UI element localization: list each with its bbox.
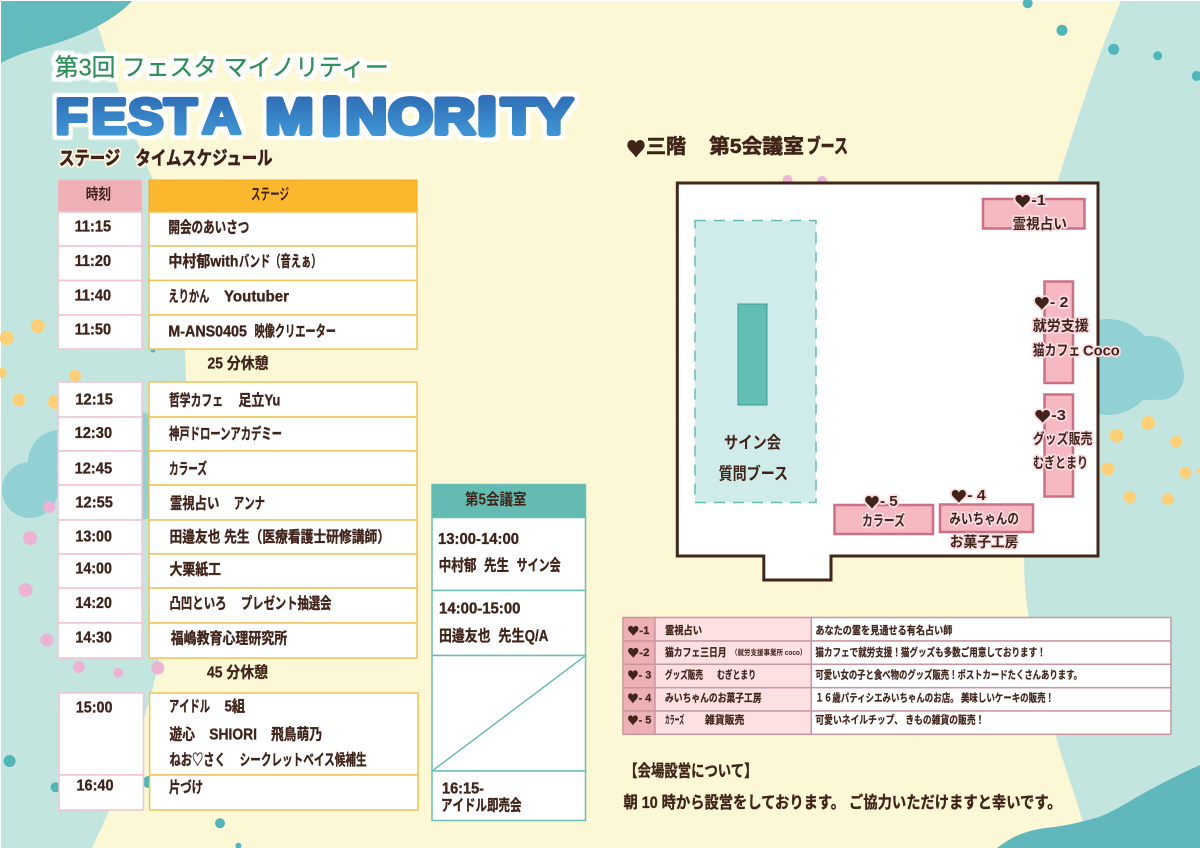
booth legend table: カラーズ (665, 712, 684, 726)
setup notice: 【会場設営について】 (624, 761, 758, 780)
title: Japanese: 第3回 フェスタ マイノリティー (55, 54, 389, 82)
schedule: stage column block 3: 飛鳥萌乃 (271, 724, 322, 743)
schedule: time column block 2: 14:30 (75, 630, 112, 646)
title: FESTA MINORITY: MINORITY (266, 89, 573, 145)
booth legend table: 霊視占い (665, 623, 702, 637)
schedule: stage column block 2: プレゼント抽選会 (241, 593, 332, 612)
room outline (677, 183, 1098, 580)
booth legend table: 可愛いネイルチップ、 きもの雑貨の販売！ (815, 712, 984, 726)
booth 1 (983, 190, 1084, 233)
setup notice (624, 761, 1062, 812)
booth 3: ♥-3 (1034, 405, 1066, 427)
schedule: stage column block 1: M-ANS0405 (168, 323, 247, 340)
schedule: stage column block 2: 大栗紙工 (170, 560, 221, 578)
schedule: stage column block 2: アンナ (234, 495, 265, 512)
sign booth area: サイン会 (724, 434, 781, 452)
panel: room 5 schedule (432, 484, 586, 820)
booth 3 (1033, 394, 1093, 496)
heading: third floor booths: ♥三階 (626, 132, 686, 162)
schedule: time column block 2: 12:55 (75, 494, 113, 512)
panel: room 5 schedule: 中村郁 (439, 555, 477, 574)
schedule: time column block 3: 15:00 (76, 700, 113, 716)
booth legend table (623, 618, 1171, 734)
booth legend table: むぎとまり (717, 667, 756, 681)
schedule: time column block 1: 時刻 (86, 186, 111, 203)
schedule: stage column block 3: 片づけ (169, 778, 203, 796)
schedule: time column block 1: 11:40 (75, 288, 111, 304)
booth legend table: 可愛い女の子と食べ物のグッズ販売！ポストカードたくさんあります。 (815, 667, 1082, 681)
booth 4: みいちゃんの (949, 511, 1019, 528)
schedule: stage column block 2: 福嶋教育心理研究所 (171, 628, 288, 647)
schedule: stage column block 2: 田邉友也 先生（医療看護士研修講師） (170, 527, 390, 546)
booth 2: 猫カフェ (1033, 342, 1080, 360)
schedule: time column block 1: 11:15 (75, 218, 111, 236)
panel: room 5 schedule: 第5会議室 (465, 490, 526, 508)
schedule: stage column block 2: 霊視占い (170, 494, 219, 512)
booth legend table: ♥-1 (627, 623, 650, 639)
booth 2: Coco (1083, 344, 1120, 360)
schedule: stage column block 1: Youtuber (224, 288, 289, 305)
schedule: stage column block 2: 哲学カフェ (169, 390, 223, 409)
title: FESTA MINORITY (55, 89, 573, 145)
title: FESTA MINORITY: FESTA (55, 89, 241, 145)
booth 5: カラーズ (862, 512, 905, 530)
schedule: time column block 2: 12:45 (75, 460, 112, 478)
schedule: time column block 2 (58, 382, 142, 658)
panel: room 5 schedule: 13:00-14:00 (438, 531, 519, 548)
booth legend table: あなたの霊を見通せる有名占い師 (815, 623, 952, 637)
schedule: time column block 1: 11:50 (75, 322, 111, 338)
panel: room 5 schedule: 先生 (484, 556, 509, 574)
booth legend table: （就労支援事業所 coco） (731, 647, 806, 657)
sign booth area: 質問ブース (719, 464, 788, 484)
booth legend table: ♥- 4 (627, 691, 652, 707)
heading: stage time schedule: ステージ タイムスケジュール (59, 148, 272, 170)
schedule: time column block 2: 12:30 (75, 425, 112, 442)
schedule: time column block 1 (58, 180, 142, 349)
booth legend table: みいちゃんのお菓子工房 (665, 691, 762, 705)
panel: room 5 schedule: 14:00-15:00 (439, 600, 520, 617)
booth 5: ♥- 5 (864, 491, 898, 513)
panel: room 5 schedule: 田邉友也 (439, 627, 491, 645)
booth 4: お菓子工房 (950, 534, 1018, 551)
schedule: time column block 2: 13:00 (75, 528, 112, 546)
booth 1: 霊視占い (1012, 216, 1067, 233)
booth 3: むぎとまり (1033, 454, 1088, 472)
schedule: stage column block 1: 開会のあいさつ (168, 218, 249, 236)
break: 25 minutes: 25 分休憩 (208, 354, 269, 372)
heading: third floor booths (626, 132, 848, 162)
panel: room 5 schedule: 先生Q/A (498, 627, 548, 645)
booth legend table: ♥- 3 (627, 667, 651, 683)
schedule: stage column block 1: バンド（音えぁ） (239, 252, 322, 270)
right cloud (1060, 319, 1184, 415)
schedule: time column block 3: 16:40 (76, 778, 114, 794)
booth 4: ♥- 4 (950, 485, 986, 507)
schedule: stage column block 1: 中村郁with (168, 251, 238, 270)
booth 3: グッズ販売 (1033, 430, 1093, 448)
panel: room 5 schedule: サイン会 (517, 556, 561, 574)
schedule: stage column block 3: SHIORI (209, 726, 257, 743)
schedule: stage column block 2: 足立Yu (238, 391, 280, 409)
booth legend table: 雑貨販売 (705, 712, 744, 726)
booth 1: ♥-1 (1014, 190, 1046, 212)
setup notice: 朝 10 時から設営をしております。 ご協力いただけますと幸いです。 (624, 792, 1062, 812)
booth legend table: 猫カフェ三日月 (665, 645, 727, 659)
booth legend table: １６歳パティシエみいちゃんのお店。 美味しいケーキの販売！ (815, 691, 1054, 705)
booth 4 (940, 485, 1033, 551)
booth 2 (1033, 282, 1120, 383)
booth legend table: ♥- 5 (627, 712, 651, 728)
schedule: stage column block 1: ステージ (251, 186, 289, 204)
schedule: time column block 2: 14:20 (75, 595, 112, 612)
decorative dots: yellow (0, 319, 1200, 505)
schedule: stage column block 1: えりかん (168, 287, 209, 305)
schedule: stage column block 3: 5組 (225, 697, 246, 715)
booth 5 (834, 491, 933, 534)
schedule: time column block 2: 12:15 (75, 392, 113, 408)
floor plan (677, 183, 1120, 580)
left cloud (2, 410, 184, 522)
booth 2: 就労支援 (1033, 318, 1089, 335)
booth legend table: ♥-2 (627, 645, 650, 661)
booth legend table: グッズ販売 (665, 667, 703, 681)
schedule: stage column block 1 (149, 180, 417, 349)
schedule: stage column block 2: 凸凹といろ (170, 594, 226, 612)
schedule: stage column block 2: 神戸ドローンアカデミー (169, 424, 282, 443)
break: 45 minutes: 45 分休憩 (207, 662, 268, 682)
schedule: stage column block 3 (150, 693, 418, 810)
schedule: stage column block 2: カラーズ (169, 459, 207, 478)
schedule: time column block 1: 11:20 (75, 253, 111, 270)
panel: room 5 schedule: アイドル即売会 (441, 796, 522, 814)
panel: room 5 schedule: 16:15- (442, 780, 484, 797)
schedule: stage column block 3: 遊心 (170, 724, 195, 743)
schedule: stage column block 1: 映像クリエーター (254, 322, 336, 340)
decorative dots: pink (19, 175, 827, 678)
schedule: stage column block 3: アイドル (169, 698, 210, 715)
heading: third floor booths: ブース (807, 134, 848, 158)
booth 2: ♥- 2 (1034, 292, 1068, 314)
sign booth area (695, 220, 816, 502)
schedule: stage column block 2 (149, 382, 417, 658)
schedule: time column block 3 (59, 693, 144, 810)
booth legend table: 猫カフェで就労支援！猫グッズも多数ご用意しております！ (815, 645, 1046, 659)
schedule: stage column block 3: ねお♡さく (170, 751, 226, 769)
schedule: stage column block 3: シークレットベイス候補生 (240, 751, 367, 769)
heading: third floor booths: 第5会議室 (709, 135, 804, 158)
schedule: time column block 2: 14:00 (75, 560, 112, 578)
